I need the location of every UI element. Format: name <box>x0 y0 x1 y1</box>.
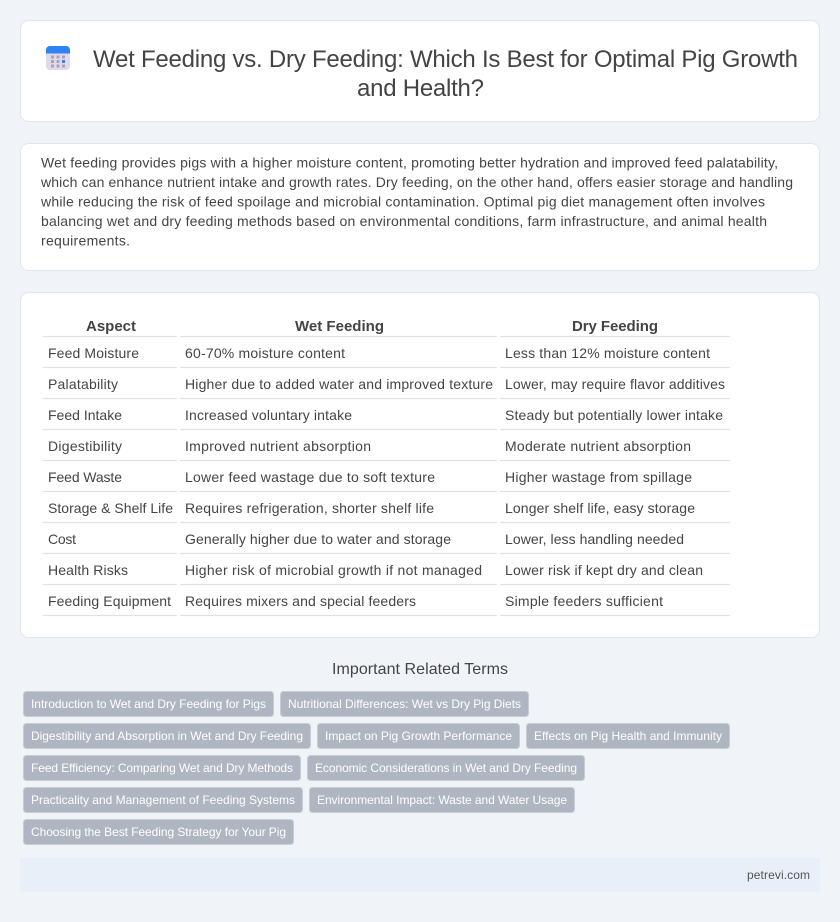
row: Feed Intake: Feed Intake <box>48 407 122 423</box>
intro paragraph: while reducing the risk of feed spoilage and microbial contamination. Optimal pig diet management often involves <box>40 194 765 210</box>
table header: Wet Feeding <box>295 318 384 335</box>
row: Palatability <box>43 376 730 398</box>
tag <box>24 756 300 780</box>
row: Digestibility: Improved nutrient absorption <box>185 438 371 454</box>
footer <box>20 858 820 892</box>
icon: calendar <box>46 46 70 70</box>
title: Wet Feeding vs. Dry Feeding: Which Is Best for Optimal Pig Growth <box>93 46 798 73</box>
tag: Nutritional Differences: Wet vs Dry Pig Diets <box>288 697 521 711</box>
row: Health Risks: Higher risk of microbial growth if not managed <box>185 562 482 578</box>
tag: Impact on Pig Growth Performance <box>325 729 512 743</box>
row: Cost: Lower, less handling needed <box>505 531 684 547</box>
row: Feeding Equipment: Simple feeders sufficient <box>505 593 663 609</box>
title <box>93 46 798 102</box>
tag <box>318 724 520 748</box>
row: Feed Moisture <box>43 345 730 368</box>
tag <box>24 692 274 716</box>
row: Feeding Equipment <box>43 593 730 616</box>
row: Feed Intake: Steady but potentially lower intake <box>505 407 723 423</box>
table header: Dry Feeding <box>572 318 658 335</box>
row: Storage and Shelf Life <box>43 500 730 522</box>
tag <box>526 724 730 748</box>
tag: Environmental Impact: Waste and Water Usage <box>317 793 567 807</box>
row: Cost <box>43 531 730 554</box>
row: Storage and Shelf Life: Storage & Shelf Life <box>48 500 173 516</box>
row: Feed Moisture: 60-70% moisture content <box>185 345 345 361</box>
tag: Digestibility and Absorption in Wet and Dry Feeding <box>31 729 303 743</box>
row: Feeding Equipment: Feeding Equipment <box>48 593 171 609</box>
row: Digestibility <box>43 438 730 460</box>
tag <box>24 724 310 748</box>
row: Feeding Equipment: Requires mixers and special feeders <box>185 593 416 609</box>
heading: important related terms: Important Related Terms <box>332 661 508 678</box>
title: and Health? <box>357 75 484 102</box>
tag: Effects on Pig Health and Immunity <box>534 729 722 743</box>
intro paragraph: balancing wet and dry feeding methods based on environmental conditions, farm infrastructure, and animal health <box>41 213 767 229</box>
tag: Economic Considerations in Wet and Dry Feeding <box>315 761 577 775</box>
intro paragraph: which can enhance nutrient intake and growth rates. Dry feeding, on the other hand, offers easier storage and handling <box>40 174 793 190</box>
row: Feed Intake: Increased voluntary intake <box>185 407 352 423</box>
row: Palatability: Palatability <box>48 376 118 392</box>
tag: Introduction to Wet and Dry Feeding for Pigs <box>31 697 266 711</box>
table header <box>43 318 730 336</box>
row: Feed Waste: Lower feed wastage due to soft texture <box>185 469 435 485</box>
row: Palatability: Lower, may require flavor additives <box>505 376 725 392</box>
row: Cost: Generally higher due to water and storage <box>185 531 451 547</box>
tag <box>24 820 294 844</box>
footer source: petrevi.com <box>747 868 810 882</box>
row: Cost: Cost <box>48 531 76 547</box>
row: Palatability: Higher due to added water and improved texture <box>185 376 493 392</box>
tag: Practicality and Management of Feeding Systems <box>31 793 295 807</box>
table header: Aspect <box>86 318 136 335</box>
tag: Feed Efficiency: Comparing Wet and Dry Methods <box>31 761 293 775</box>
row: Feed Waste: Higher wastage from spillage <box>505 469 692 485</box>
tag: Choosing the Best Feeding Strategy for Your Pig <box>31 825 286 839</box>
row: Health Risks: Lower risk if kept dry and clean <box>505 562 703 578</box>
row: Digestibility: Digestibility <box>48 438 122 454</box>
intro paragraph: Wet feeding provides pigs with a higher moisture content, promoting better hydration and improved feed palatability, <box>41 154 778 170</box>
tag <box>280 692 528 716</box>
row: Storage and Shelf Life: Longer shelf life, easy storage <box>505 500 695 516</box>
row: Feed Waste: Feed Waste <box>48 469 122 485</box>
tag <box>310 788 574 812</box>
row: Digestibility: Moderate nutrient absorption <box>505 438 691 454</box>
row: Feed Moisture: Less than 12% moisture content <box>505 345 710 361</box>
related term tags <box>24 692 730 844</box>
row: Feed Moisture: Feed Moisture <box>48 345 139 361</box>
intro paragraph: requirements. <box>41 232 130 248</box>
panel: comparison table <box>20 292 820 638</box>
row: Feed Waste <box>43 469 730 492</box>
intro paragraph <box>40 154 793 248</box>
tag <box>24 788 302 812</box>
panel: header <box>20 20 820 122</box>
row: Health Risks <box>43 562 730 584</box>
row: Feed Intake <box>43 407 730 430</box>
row: Health Risks: Health Risks <box>48 562 128 578</box>
tag <box>308 756 584 780</box>
row: Storage and Shelf Life: Requires refrigeration, shorter shelf life <box>185 500 434 516</box>
panel: intro text <box>20 144 820 270</box>
